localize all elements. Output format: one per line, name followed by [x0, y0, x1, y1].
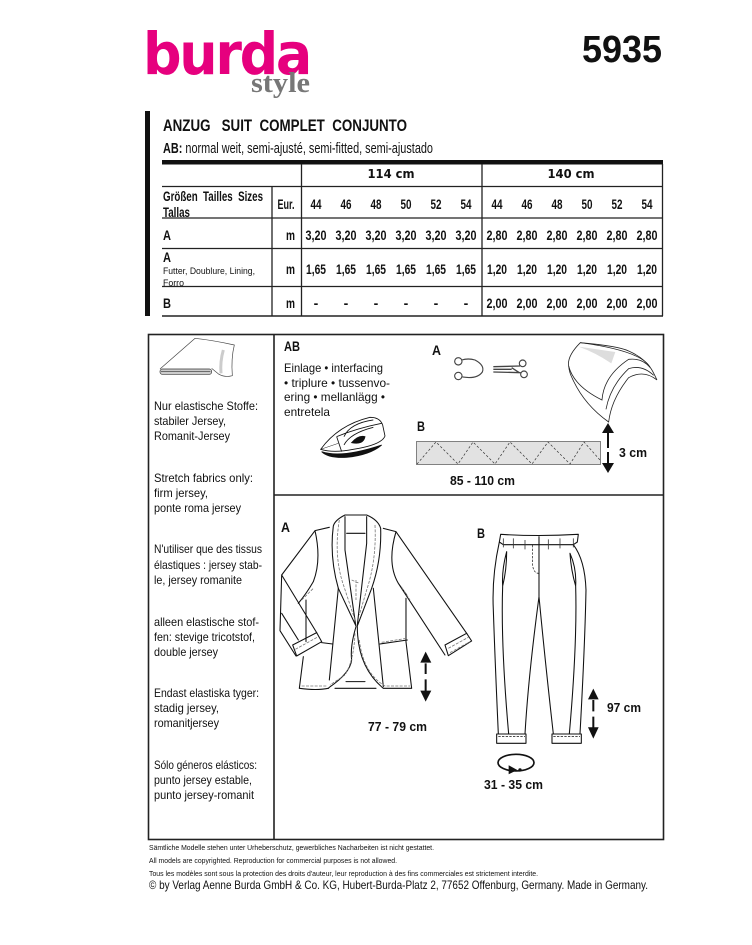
unit column: m: [286, 227, 295, 243]
heading: AB: AB: [284, 338, 300, 354]
heading: B tape: B: [417, 418, 425, 434]
fabric recommendations: Sólo géneros elásticos:: [154, 758, 257, 772]
row A lining values: 1,20: [637, 261, 657, 277]
row labels: Größen Tailles Sizes: [163, 188, 263, 204]
row B values: -: [344, 295, 349, 311]
sizes: 52: [612, 196, 623, 212]
interfacing text: • triplure • tussenvo-: [284, 376, 390, 390]
sizes: 46: [340, 196, 352, 212]
icon: circumference loop: [498, 754, 534, 774]
row B values: -: [434, 295, 439, 311]
row A lining values: 1,20: [577, 261, 597, 277]
row A values: 2,80: [576, 227, 598, 243]
fabric recommendations: ponte roma jersey: [154, 501, 241, 515]
row A lining values: [306, 261, 657, 277]
unit column: m: [286, 261, 295, 277]
interfacing text: [284, 361, 390, 419]
row A lining values: 1,20: [487, 261, 507, 277]
icon: shoulder pads: [568, 343, 657, 422]
row A lining values: 1,65: [306, 261, 326, 277]
row B values: -: [314, 295, 319, 311]
fabric recommendations: stabiler Jersey,: [154, 414, 226, 428]
row B values: 2,00: [516, 295, 538, 311]
row A values: 2,80: [546, 227, 568, 243]
panel frame: [148, 334, 664, 840]
fabric recommendations: Endast elastiska tyger:: [154, 686, 259, 700]
arrow: tape width: [602, 423, 614, 473]
sizes: 50: [400, 196, 412, 212]
heading: B trousers: B: [477, 525, 485, 541]
copyright notices: Sämtliche Modelle stehen unter Urheberschutz, gewerbliches Nacharbeiten ist nicht gestattet.: [149, 843, 434, 852]
label: 85 - 110 cm: 85 - 110 cm: [450, 474, 515, 488]
icon: folded fabric: [160, 338, 234, 376]
row A values: 3,20: [366, 227, 387, 243]
sizes: [310, 196, 653, 212]
sizes: 52: [430, 196, 442, 212]
yardage table: [162, 160, 663, 316]
fabric recommendations: Nur elastische Stoffe:: [154, 399, 258, 413]
row A lining values: 1,65: [456, 261, 476, 277]
sizes: 44: [492, 196, 503, 212]
fabric recommendations: Stretch fabrics only:: [154, 471, 253, 485]
row B values: -: [404, 295, 409, 311]
fabric recommendations: [154, 399, 262, 802]
sizes: 54: [460, 196, 472, 212]
row A lining values: 1,65: [366, 261, 386, 277]
logo: burda style: burda: [143, 21, 310, 88]
row A values: [306, 227, 658, 243]
row B values: [314, 295, 658, 311]
row A lining values: 1,65: [426, 261, 446, 277]
pattern number: 5935: [582, 29, 662, 71]
row labels: Forro: [163, 278, 184, 289]
fabric recommendations: le, jersey romanite: [154, 573, 242, 587]
row A values: 3,20: [306, 227, 327, 243]
copyright notices: Tous les modèles sont sous la protection des droits d'auteur, leur reproduction à des fins commerciales est strictement interdite.: [149, 869, 538, 878]
fabric recommendations: Romanit-Jersey: [154, 429, 230, 443]
heading: A notions: A: [432, 342, 441, 358]
label: 97 cm: 97 cm: [607, 701, 641, 715]
row B values: 2,00: [546, 295, 568, 311]
technical drawing: trousers: [493, 534, 586, 743]
icon: iron: [321, 417, 385, 457]
row A lining values: 1,20: [547, 261, 567, 277]
row B values: -: [464, 295, 469, 311]
row B values: 2,00: [486, 295, 508, 311]
row labels: [163, 188, 263, 311]
sizes: 44: [310, 196, 322, 212]
row A values: 3,20: [426, 227, 447, 243]
column heading: 114 cm: 114 cm: [368, 167, 414, 181]
fabric recommendations: N'utiliser que des tissus: [154, 542, 262, 556]
tape strip: [416, 442, 600, 464]
row B values: -: [374, 295, 379, 311]
row A values: 3,20: [396, 227, 417, 243]
row A values: 2,80: [516, 227, 538, 243]
row A values: 3,20: [336, 227, 357, 243]
interfacing text: ering • mellanlägg •: [284, 390, 385, 404]
fabric recommendations: romanitjersey: [154, 716, 219, 730]
row B values: 2,00: [636, 295, 658, 311]
title: ANZUG SUIT COMPLET CONJUNTO: [163, 116, 407, 135]
row A lining values: 1,65: [396, 261, 416, 277]
fabric recommendations: alleen elastische stof-: [154, 615, 259, 629]
fabric recommendations: élastiques : jersey stab-: [154, 558, 262, 572]
fabric recommendations: fen: stevige tricotstof,: [154, 630, 255, 644]
sizes: 48: [370, 196, 382, 212]
fabric recommendations: firm jersey,: [154, 486, 208, 500]
column heading: 140 cm: 140 cm: [548, 167, 594, 181]
unit column: Eur.: [278, 196, 294, 212]
unit column: m: [286, 295, 295, 311]
fabric recommendations: stadig jersey,: [154, 701, 219, 715]
copyright notices: © by Verlag Aenne Burda GmbH & Co. KG, Hubert-Burda-Platz 2, 77652 Offenburg, Germany. Made in Germany.: [149, 878, 648, 892]
arrow: jacket length: [420, 652, 431, 702]
row B values: 2,00: [606, 295, 628, 311]
sizes: 48: [552, 196, 563, 212]
sizes: 54: [642, 196, 653, 212]
interfacing text: entretela: [284, 405, 330, 419]
logo: burda style: style: [251, 68, 310, 99]
technical drawing: jacket: [280, 515, 472, 689]
heading: A jacket: A: [281, 519, 290, 535]
label: 3 cm: 3 cm: [619, 446, 647, 460]
row A values: 2,80: [636, 227, 658, 243]
row B values: 2,00: [576, 295, 598, 311]
label: 77 - 79 cm: 77 - 79 cm: [368, 720, 427, 734]
row A values: 2,80: [606, 227, 628, 243]
sizes: 50: [582, 196, 593, 212]
fabric recommendations: double jersey: [154, 645, 218, 659]
row labels: A: [163, 249, 171, 265]
row labels: B: [163, 295, 171, 311]
copyright notices: [149, 843, 648, 892]
sizes: 46: [522, 196, 533, 212]
row A lining values: 1,20: [517, 261, 537, 277]
fabric recommendations: punto jersey-romanit: [154, 788, 255, 802]
fabric recommendations: punto jersey estable,: [154, 773, 252, 787]
row A lining values: 1,20: [607, 261, 627, 277]
copyright notices: All models are copyrighted. Reproduction for commercial purposes is not allowed.: [149, 856, 397, 865]
arrow: trouser length: [588, 689, 599, 739]
interfacing text: Einlage • interfacing: [284, 361, 383, 375]
row labels: Futter, Doublure, Lining,: [163, 266, 255, 277]
row labels: Tallas: [163, 204, 190, 220]
accent bar: [145, 111, 150, 316]
row A values: 2,80: [486, 227, 508, 243]
row A lining values: 1,65: [336, 261, 356, 277]
row A values: 3,20: [456, 227, 477, 243]
label: 31 - 35 cm: 31 - 35 cm: [484, 778, 543, 792]
row labels: A: [163, 227, 171, 243]
icon: hook and eye: [455, 358, 527, 380]
unit column: [278, 196, 295, 311]
subtitle: AB: normal weit, semi-ajusté, semi-fitted, semi-ajustado: [163, 140, 433, 157]
